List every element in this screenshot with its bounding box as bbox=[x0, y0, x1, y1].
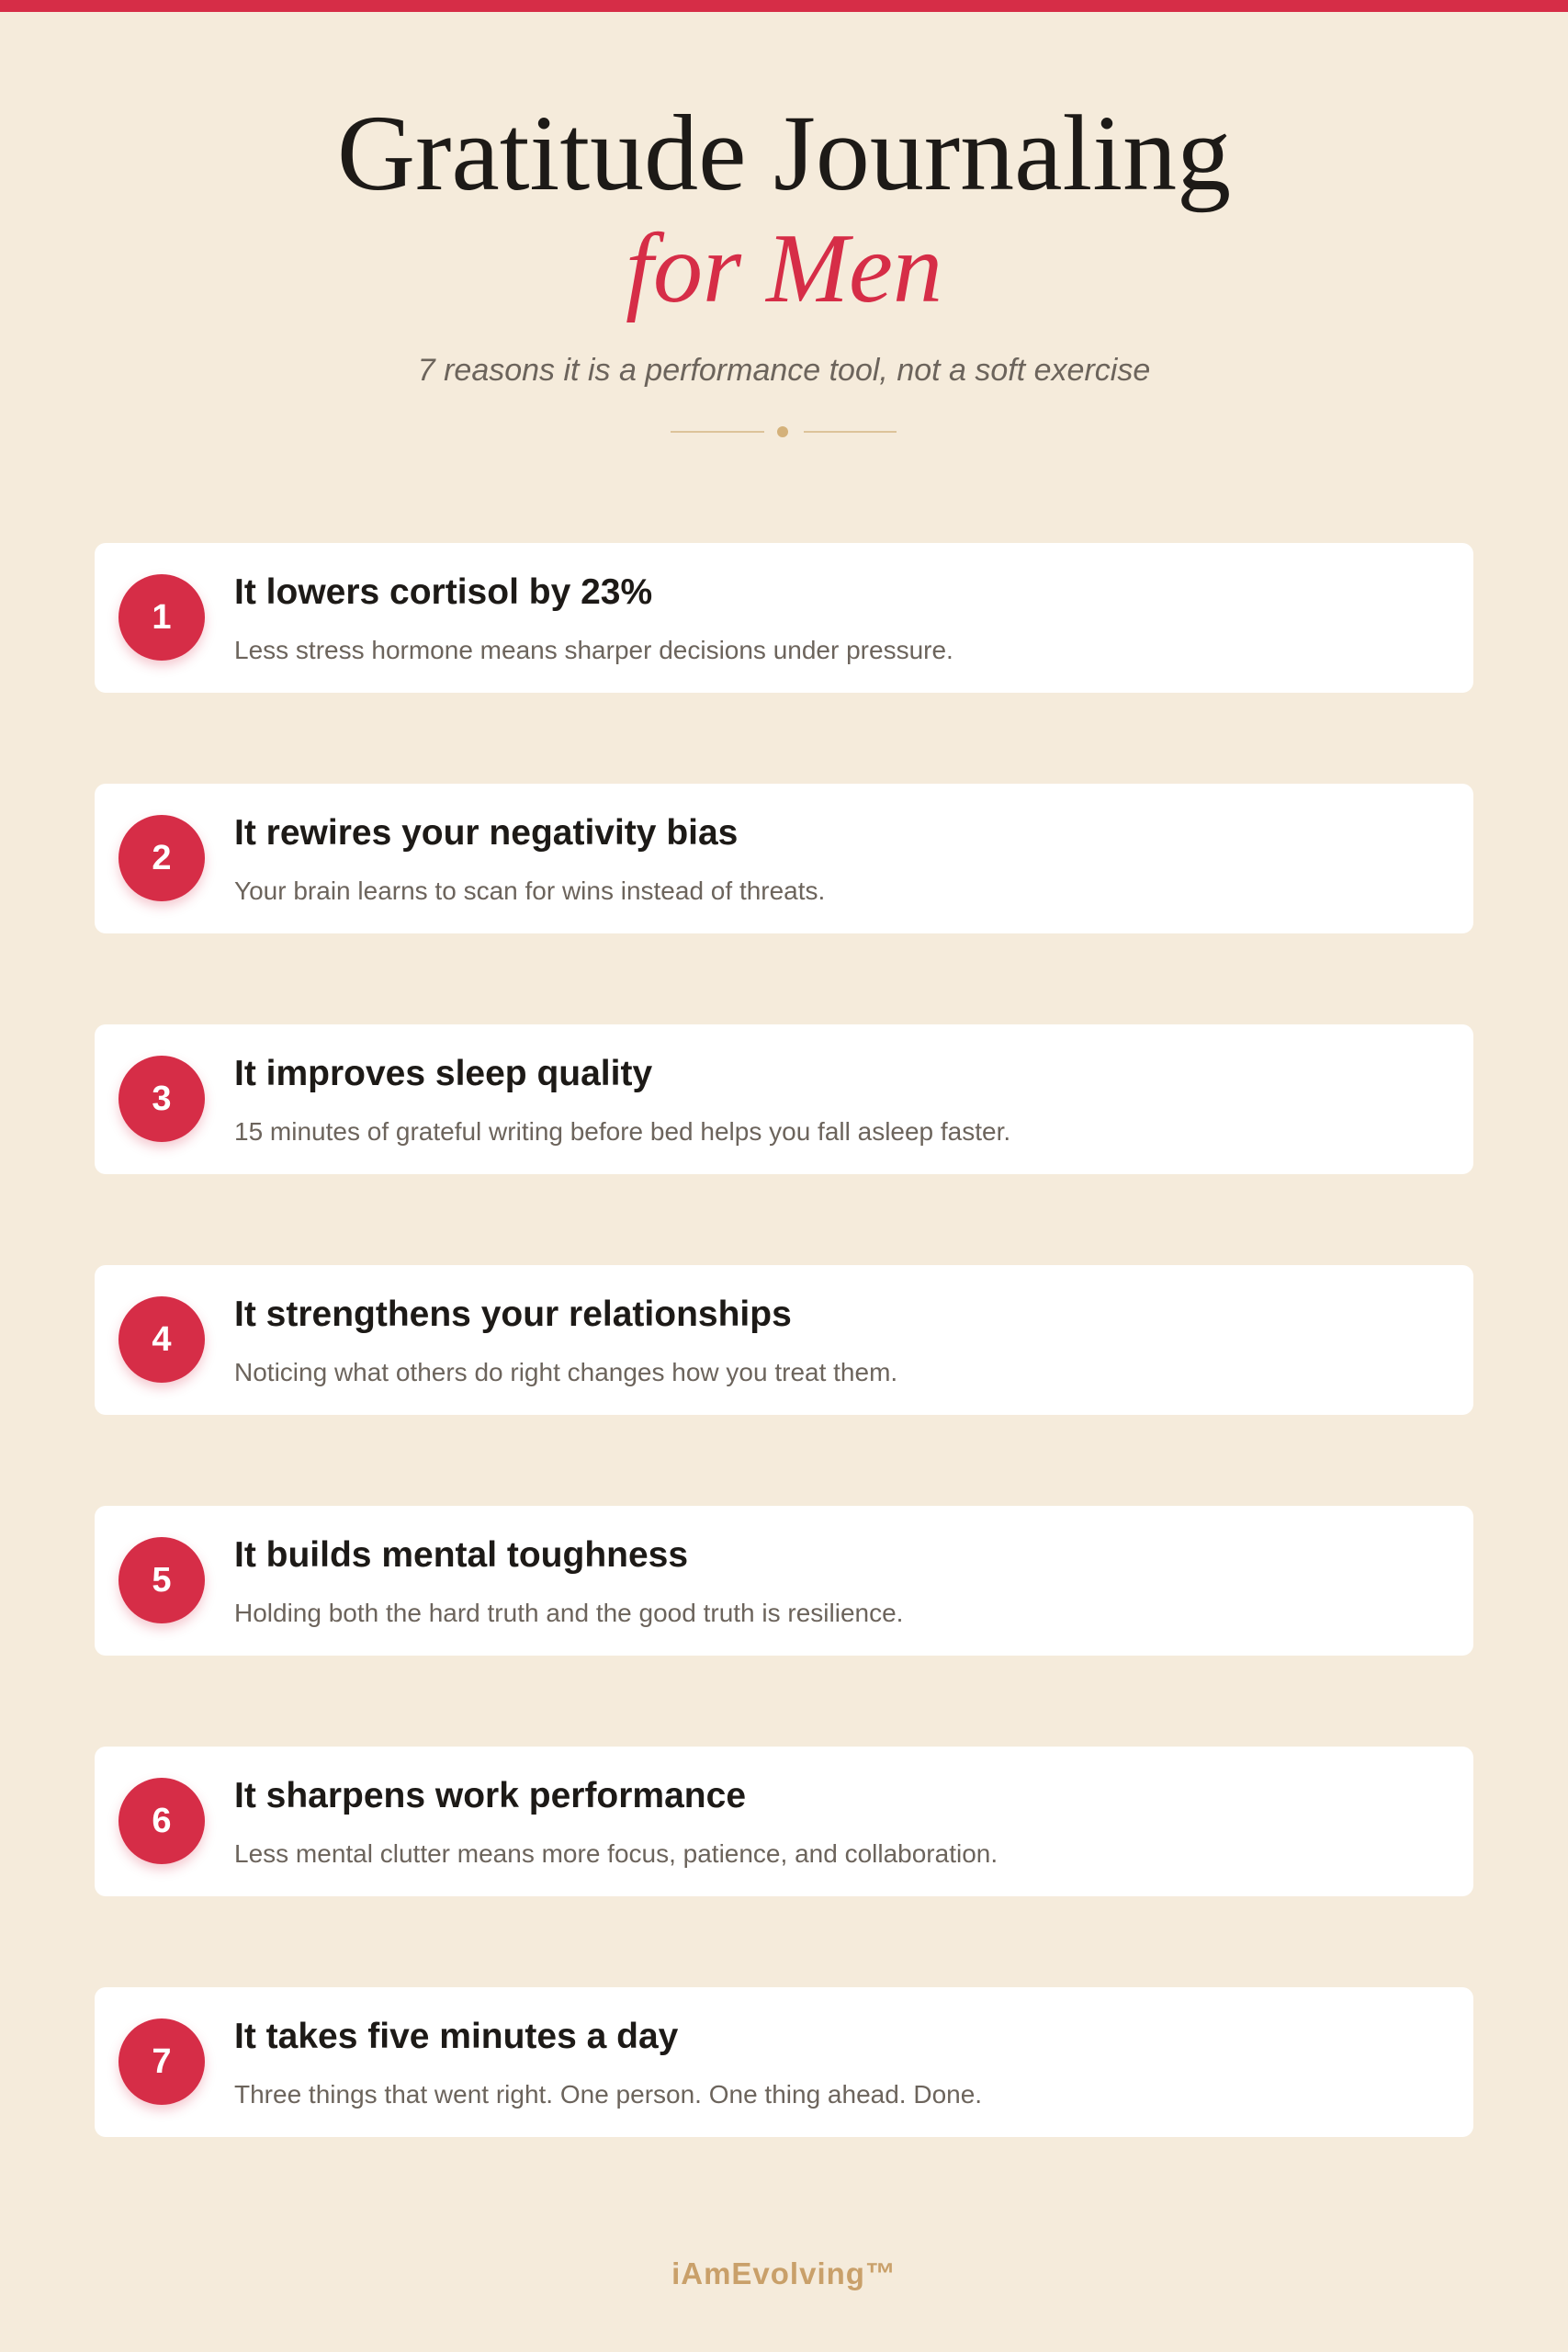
card 1: It lowers cortisol by 23% bbox=[234, 572, 652, 612]
card 3: 15 minutes of grateful writing before bed helps you fall asleep faster. bbox=[234, 1117, 1010, 1146]
card 6: It sharpens work performance bbox=[234, 1776, 746, 1815]
card 4 bbox=[95, 1265, 1473, 1415]
card 7: 7 bbox=[152, 2042, 172, 2081]
card 2: It rewires your negativity bias bbox=[234, 813, 738, 853]
card 5 bbox=[95, 1506, 1473, 1656]
title: Gratitude Journaling bbox=[337, 93, 1231, 213]
card 3: It improves sleep quality bbox=[234, 1054, 652, 1093]
card 4: It strengthens your relationships bbox=[234, 1295, 792, 1334]
subtitle: 7 reasons it is a performance tool, not a soft exercise bbox=[418, 353, 1150, 388]
card 3 bbox=[95, 1024, 1473, 1174]
card 6 bbox=[95, 1747, 1473, 1896]
card 7: It takes five minutes a day bbox=[234, 2017, 678, 2056]
card 4: 4 bbox=[152, 1320, 172, 1359]
card 2: 2 bbox=[152, 839, 172, 877]
card 5: 5 bbox=[152, 1561, 172, 1600]
card 1: Less stress hormone means sharper decisions under pressure. bbox=[234, 636, 953, 664]
title accent: for Men bbox=[626, 214, 942, 323]
card 4: Noticing what others do right changes how you treat them. bbox=[234, 1358, 897, 1386]
card 5: It builds mental toughness bbox=[234, 1535, 688, 1575]
footer brand: iAmEvolving™ bbox=[671, 2256, 897, 2290]
card 3: 3 bbox=[152, 1080, 172, 1118]
card 7 bbox=[95, 1987, 1473, 2137]
card 7: Three things that went right. One person. One thing ahead. Done. bbox=[234, 2080, 982, 2109]
card 2: Your brain learns to scan for wins instead of threats. bbox=[234, 876, 825, 905]
card 1 bbox=[95, 543, 1473, 693]
card 2 bbox=[95, 784, 1473, 933]
card 6: Less mental clutter means more focus, patience, and collaboration. bbox=[234, 1839, 998, 1868]
card 5: Holding both the hard truth and the good truth is resilience. bbox=[234, 1599, 903, 1627]
card 1: 1 bbox=[152, 598, 172, 637]
card 6: 6 bbox=[152, 1802, 172, 1840]
